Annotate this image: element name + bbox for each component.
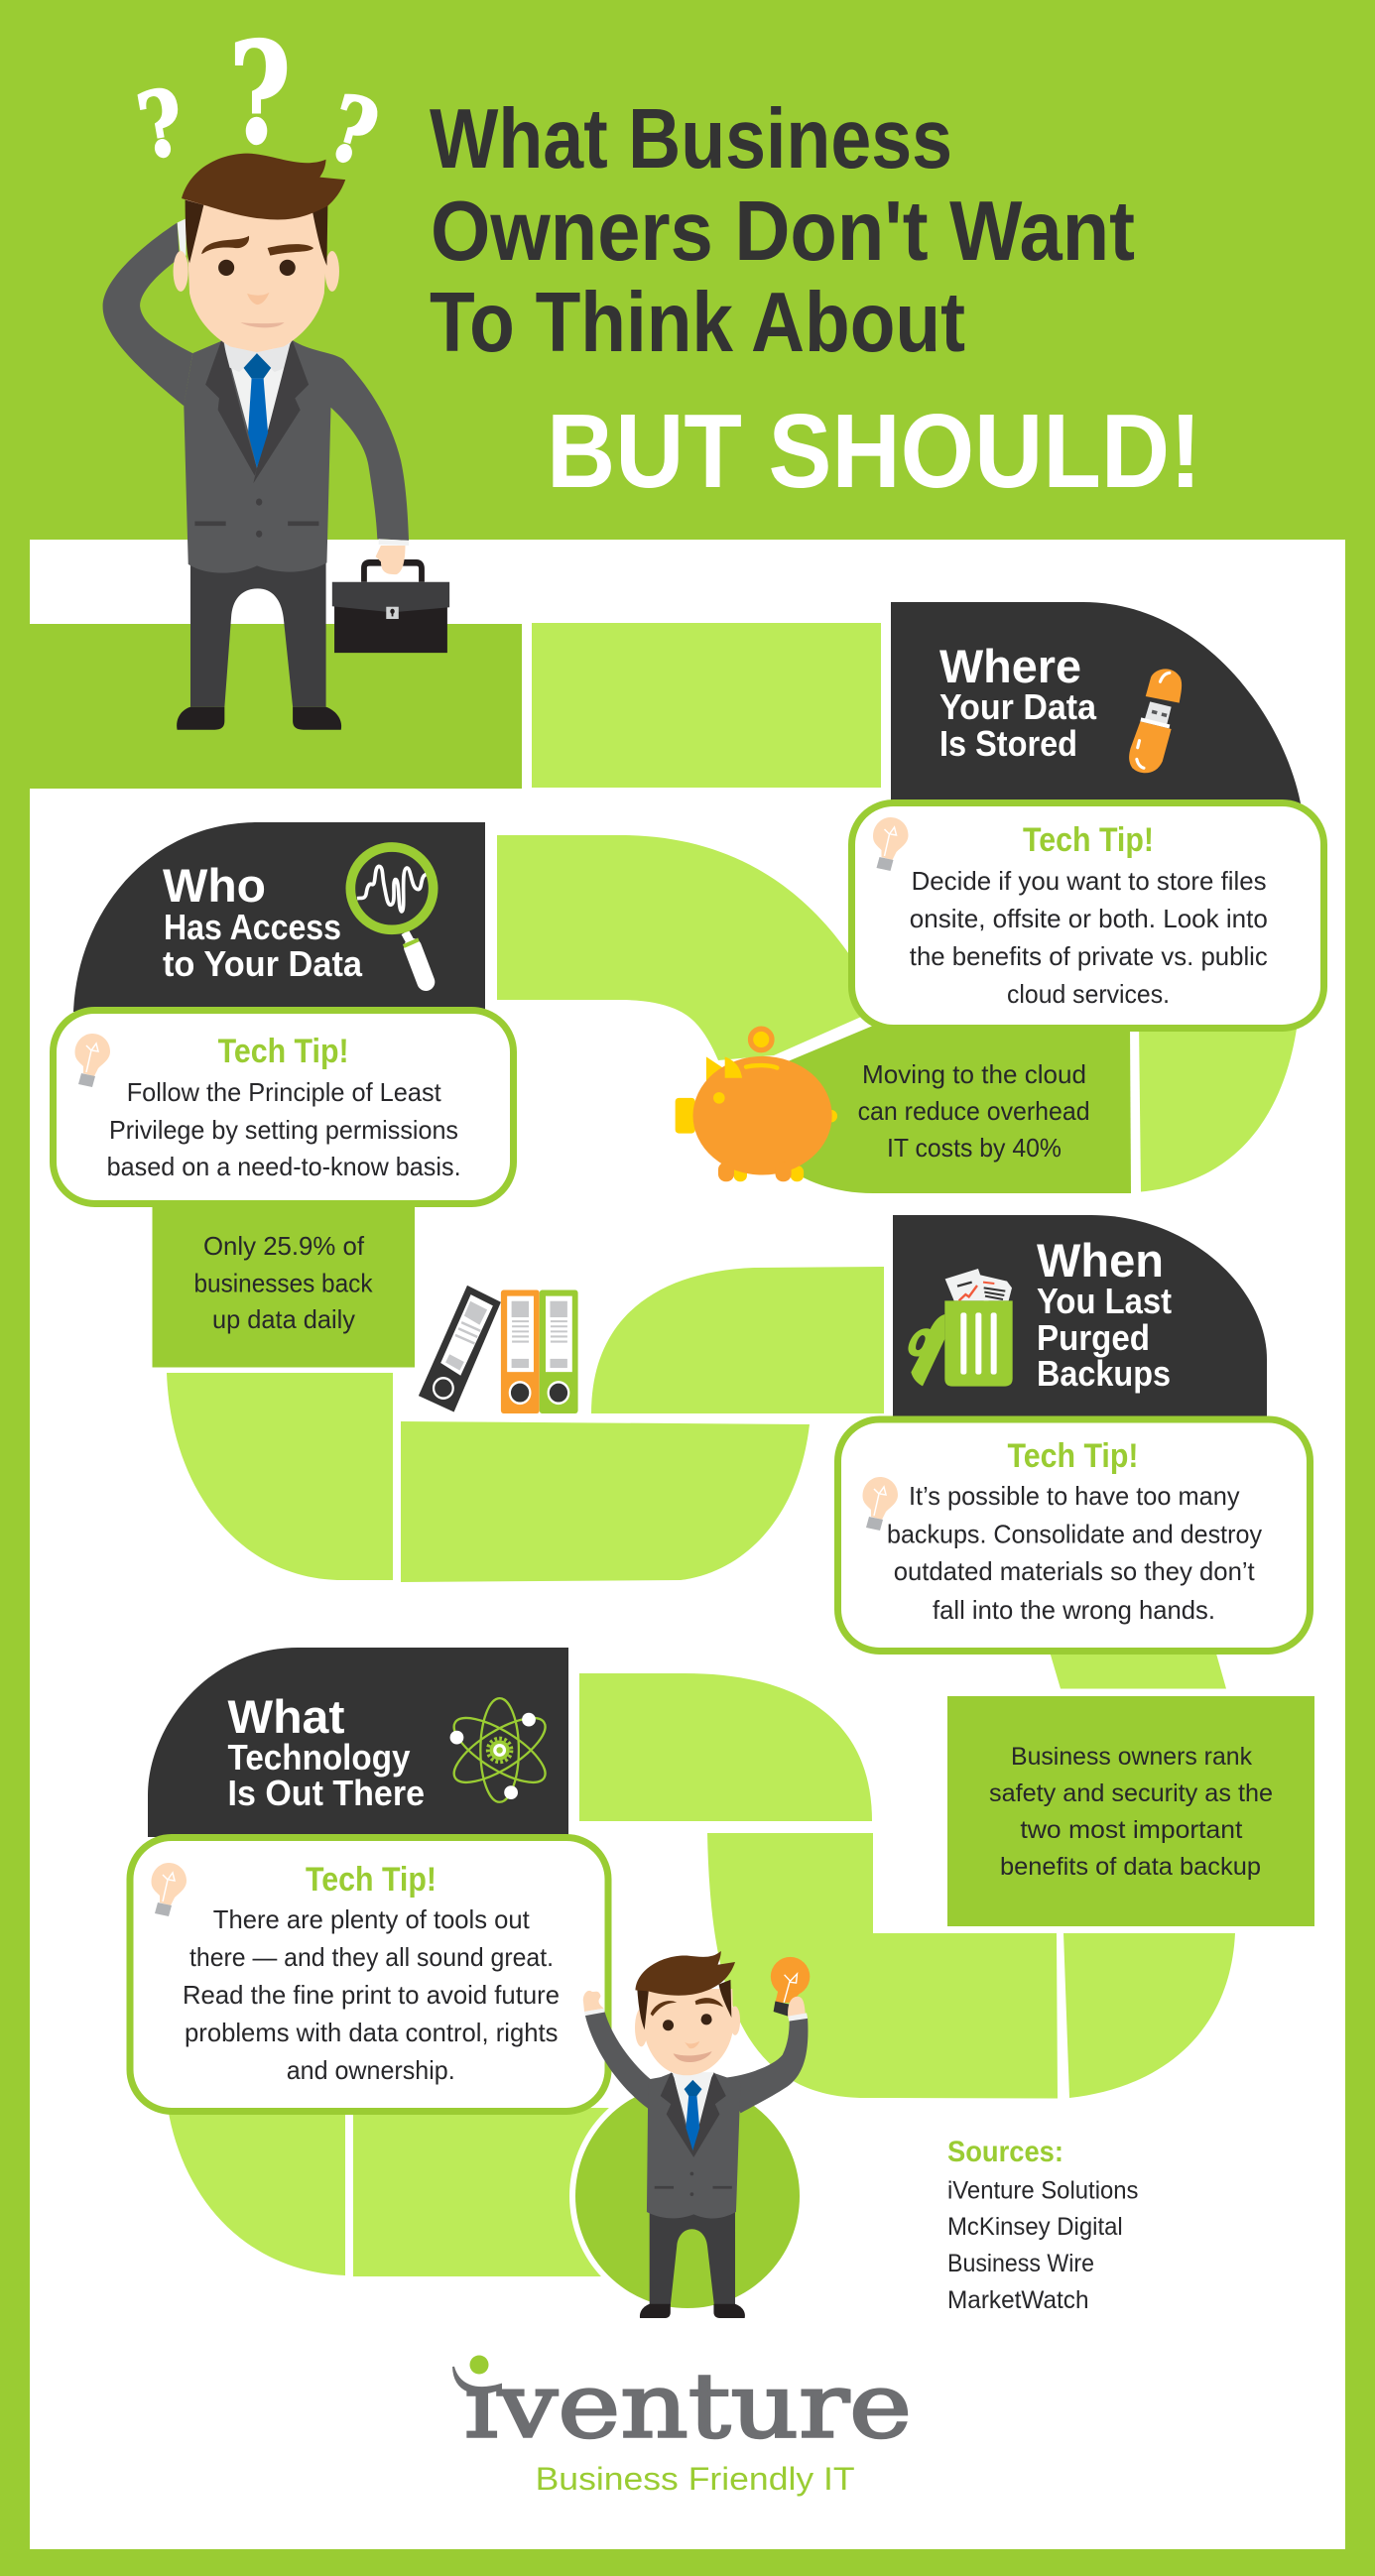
tech tip: where your data is stored: the benefits of private vs. public [910, 941, 1268, 971]
panel: who has access to your data: Has Access [164, 907, 341, 947]
circle behind second man [569, 2078, 806, 2314]
stat: moving to the cloud: IT costs by 40% [887, 1133, 1062, 1163]
icon: question marks: ? [229, 13, 291, 176]
tech tip: where your data is stored: Tech Tip! [1023, 821, 1154, 859]
stat: safety and security: two most important [1020, 1816, 1242, 1844]
icon: binders [419, 1286, 578, 1413]
title emphasis: BUT SHOULD! [547, 393, 1201, 510]
title: What Business [430, 92, 952, 186]
stat: safety and security: safety and security as the [989, 1779, 1273, 1807]
dark green road piece behind piggy bank [754, 1026, 1131, 1193]
panel: when you last purged backups: When [1037, 1234, 1164, 1287]
sources list: iVenture Solutions [947, 2176, 1139, 2204]
tech tip: what technology: problems with data control, rights [185, 2018, 558, 2047]
tech tip: what technology: Read the fine print to avoid future [183, 1980, 560, 2010]
panel: what technology is out there [148, 1648, 568, 1837]
icon: trash can with papers [908, 1269, 1013, 1387]
white content panel [30, 540, 1345, 2549]
tech tip: who has access: Tech Tip! [218, 1033, 349, 1070]
icon: piggy bank [676, 1029, 837, 1181]
icon: light bulb [75, 1034, 110, 1087]
stat: safety and security: benefits of data backup [1000, 1853, 1261, 1881]
tech tip: when you last purged: fall into the wrong hands. [933, 1595, 1215, 1625]
stat: only 25.9% back up daily: Only 25.9% of [203, 1231, 365, 1261]
stat: moving to the cloud: can reduce overhead [858, 1096, 1090, 1126]
tech tip: where your data is stored: onsite, offsite or both. Look into [910, 904, 1268, 933]
stat: only 25.9% back up daily [153, 1207, 415, 1367]
dark green road block behind first man [30, 624, 522, 789]
sources list [947, 2136, 1139, 2314]
panel: when you last purged backups: Backups [1037, 1353, 1171, 1394]
tech tip: when you last purged: It’s possible to have too many [909, 1481, 1240, 1511]
panel: when you last purged backups: Purged [1037, 1317, 1150, 1358]
icon: light bulb [151, 1863, 187, 1916]
tech tip: when you last purged: Tech Tip! [1008, 1437, 1139, 1475]
logo: iventure: iventure [464, 2355, 912, 2458]
panel: when you last purged backups [893, 1215, 1267, 1420]
panel: what technology is out there: Is Out There [228, 1773, 425, 1813]
logo: iventure: Business Friendly IT [536, 2461, 855, 2497]
tech tip: where your data is stored: cloud services. [1007, 979, 1170, 1009]
stat: only 25.9% back up daily: up data daily [212, 1304, 355, 1334]
icon: light bulb [873, 817, 909, 871]
panel: what technology is out there: Technology [228, 1737, 411, 1778]
illustration: worried businessman with briefcase [103, 154, 449, 730]
panel: where your data is stored: Is Stored [939, 723, 1077, 764]
stat: safety and security [947, 1696, 1314, 1926]
stat: moving to the cloud: Moving to the cloud [862, 1059, 1086, 1089]
tech tip: what technology: there — and they all sound great. [189, 1942, 554, 1972]
tech tip: where your data is stored [851, 803, 1323, 1028]
tech tip: what technology [130, 1837, 608, 2111]
icon: question marks: ? [317, 74, 388, 187]
sources list: McKinsey Digital [947, 2213, 1123, 2241]
illustration: happy businessman with light bulb [583, 1951, 810, 2318]
tech tip: who has access [54, 1010, 514, 1204]
stat: safety and security: Business owners rank [1011, 1743, 1252, 1771]
title [430, 92, 1135, 370]
sources list: MarketWatch [947, 2286, 1089, 2314]
winding road segments [167, 623, 1298, 2276]
panel: where your data is stored: Your Data [939, 686, 1097, 727]
tech tip: who has access: Privilege by setting permissions [109, 1115, 458, 1145]
tech tip: what technology: There are plenty of tools out [213, 1904, 531, 1934]
icon: question marks: ? [130, 69, 191, 181]
panel: where your data is stored: Where [939, 640, 1081, 692]
tech tip: who has access: Follow the Principle of Least [127, 1077, 441, 1107]
panel: who has access to your data [73, 822, 485, 1012]
panel: who has access to your data: to Your Data [163, 943, 363, 984]
tech tip: when you last purged: outdated materials so they don’t [894, 1556, 1255, 1586]
title: To Think About [430, 276, 965, 370]
stat: only 25.9% back up daily: businesses back [194, 1268, 373, 1297]
panel: what technology is out there: What [228, 1690, 345, 1743]
tech tip: when you last purged [837, 1419, 1310, 1651]
tech tip: who has access: based on a need-to-know basis. [107, 1152, 461, 1181]
icon: magnifying glass [350, 847, 434, 982]
icon: question marks [130, 13, 388, 187]
panel: who has access to your data: Who [163, 859, 266, 912]
logo: iventure [451, 2341, 912, 2497]
title: Owners Don't Want [431, 184, 1135, 279]
sources list: Sources: [947, 2136, 1063, 2168]
icon: light bulb [863, 1477, 898, 1531]
sources list: Business Wire [947, 2250, 1094, 2277]
tech tip: what technology: Tech Tip! [306, 1861, 437, 1899]
stat: moving to the cloud [858, 1059, 1090, 1163]
panel: where your data is stored [891, 602, 1302, 808]
tech tip: what technology: and ownership. [287, 2055, 455, 2085]
icon: atom with gear [445, 1698, 555, 1802]
icon: usb drive [1129, 669, 1182, 773]
tech tip: when you last purged: backups. Consolidate and destroy [887, 1520, 1262, 1549]
tech tip: where your data is stored: Decide if you want to store files [912, 866, 1267, 896]
panel: when you last purged backups: You Last [1037, 1281, 1172, 1321]
